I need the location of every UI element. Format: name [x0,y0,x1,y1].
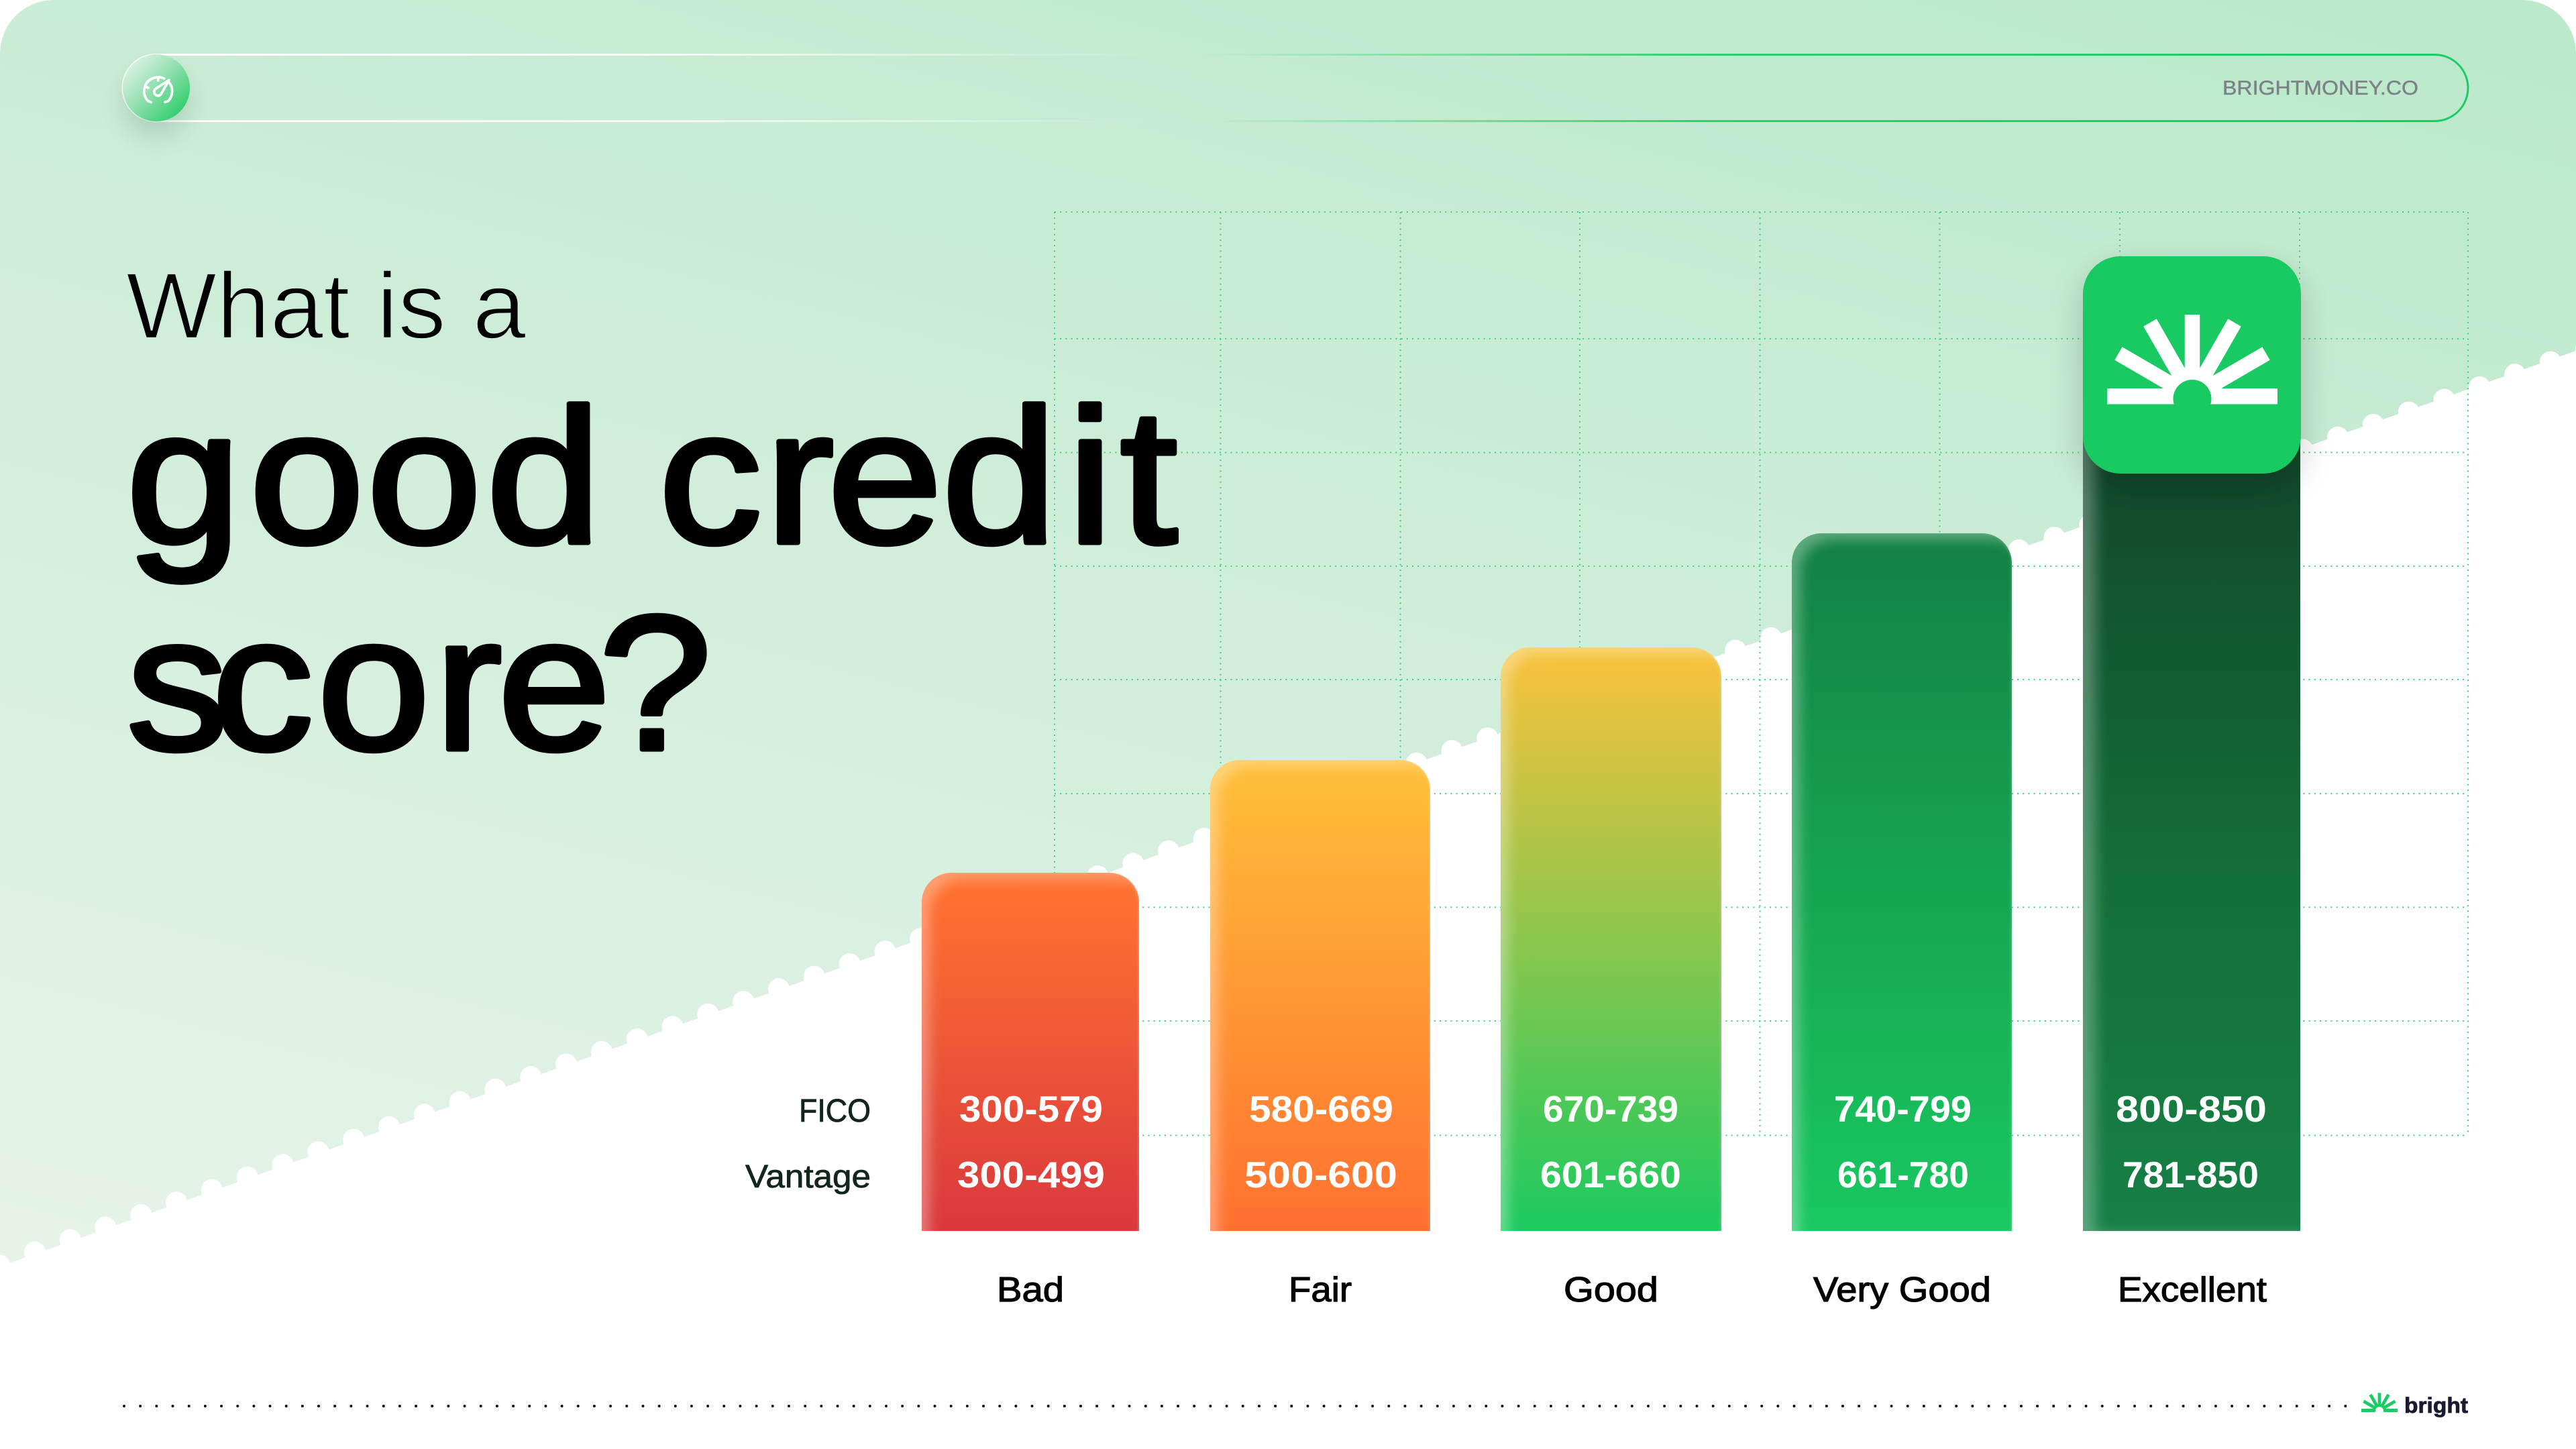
bar: Excellent [2083,376,2300,1231]
Very Good: FICO range: 740-799 [1834,1088,1972,1130]
Excellent: FICO range: 800-850 [2116,1088,2267,1130]
bar: Fair [1210,760,1430,1231]
row label: FICO: FICO [799,1093,871,1129]
bar: Bad [922,873,1139,1231]
icon: white sunburst logo [2107,315,2277,404]
Bad: category label: Bad [997,1271,1064,1309]
Excellent: category label: Excellent [2118,1271,2267,1309]
Excellent: Vantage range: 781-850 [2123,1154,2259,1195]
title line 2: good credit [126,370,1179,585]
bar: Very Good [1792,533,2012,1231]
icon: speedometer badge [123,54,190,121]
website label: BRIGHTMONEY.CO [2222,77,2418,99]
Very Good: category label: Very Good [1813,1271,1991,1309]
title line 3: score? [127,576,712,790]
Good: category label: Good [1564,1271,1658,1309]
Fair: FICO range: 580-669 [1249,1088,1393,1130]
Fair: category label: Fair [1289,1271,1352,1309]
bar: Good [1501,647,1721,1231]
logo tile on Excellent bar [2083,256,2301,474]
Very Good: Vantage range: 661-780 [1837,1154,1969,1195]
Bad: FICO range: 300-579 [959,1088,1103,1130]
Good: FICO range: 670-739 [1543,1088,1678,1130]
row label: Vantage: Vantage [745,1159,871,1195]
footer brand wordmark: bright [2404,1393,2468,1417]
Fair: Vantage range: 500-600 [1244,1154,1397,1195]
Good: Vantage range: 601-660 [1540,1154,1681,1195]
icon: footer sunburst logo [2361,1393,2398,1416]
Bad: Vantage range: 300-499 [957,1154,1105,1195]
title line 1: What is a [126,253,526,358]
